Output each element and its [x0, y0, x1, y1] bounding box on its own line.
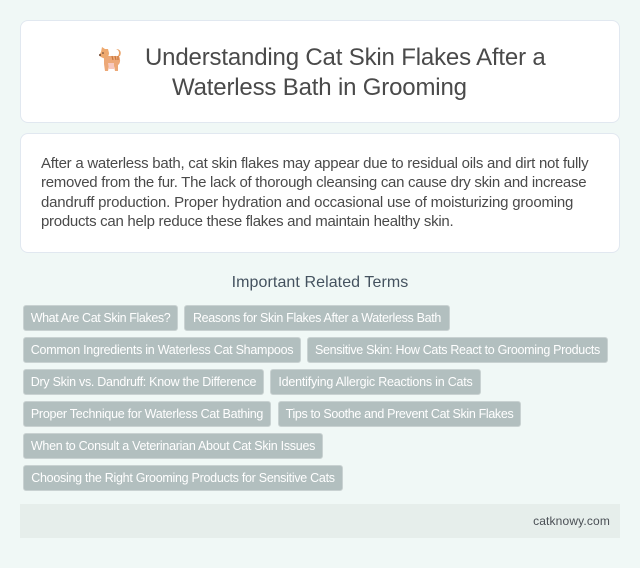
- paragraph line 3: dandruff production. Proper hydration and occasional use of moisturizing grooming: [41, 194, 573, 211]
- tag: Tips to Soothe and Prevent Cat Skin Flakes: [286, 407, 513, 421]
- panel: summary text card: [20, 133, 620, 253]
- tag: [23, 465, 343, 491]
- title line 2: Waterless Bath in Grooming: [172, 74, 467, 101]
- tag: [23, 433, 323, 459]
- summary paragraph: [41, 155, 589, 230]
- footer site name: catknowy.com: [533, 514, 610, 528]
- tag: [270, 369, 481, 395]
- icon: cat: [99, 47, 121, 71]
- tag: Dry Skin vs. Dandruff: Know the Difference: [31, 375, 256, 389]
- tag: [184, 305, 450, 331]
- tag: [278, 401, 521, 427]
- footer bar: [20, 504, 620, 538]
- tag: [23, 369, 264, 395]
- tag: When to Consult a Veterinarian About Cat Skin Issues: [31, 439, 315, 453]
- paragraph line 1: After a waterless bath, cat skin flakes may appear due to residual oils and dirt not fully: [41, 155, 588, 172]
- tag: Sensitive Skin: How Cats React to Grooming Products: [315, 343, 600, 357]
- tag: [23, 337, 301, 363]
- heading: related terms: Important Related Terms: [232, 274, 408, 291]
- panel: title card: [20, 20, 620, 123]
- tag: Proper Technique for Waterless Cat Bathing: [31, 407, 263, 421]
- tag: What Are Cat Skin Flakes?: [31, 311, 170, 325]
- tag: Choosing the Right Grooming Products for Sensitive Cats: [31, 471, 335, 485]
- paragraph line 2: removed from the fur. The lack of thorough cleansing can cause dry skin and increase: [41, 174, 586, 191]
- tag: [23, 401, 271, 427]
- tag: Identifying Allergic Reactions in Cats: [278, 375, 473, 389]
- tag: [307, 337, 608, 363]
- title line 1: Understanding Cat Skin Flakes After a: [145, 44, 546, 71]
- paragraph line 4: products can help reduce these flakes and maintain healthy skin.: [41, 213, 453, 230]
- tag: Reasons for Skin Flakes After a Waterless Bath: [193, 311, 441, 325]
- tag: [23, 305, 178, 331]
- tag list: [23, 305, 608, 491]
- tag: Common Ingredients in Waterless Cat Shampoos: [31, 343, 293, 357]
